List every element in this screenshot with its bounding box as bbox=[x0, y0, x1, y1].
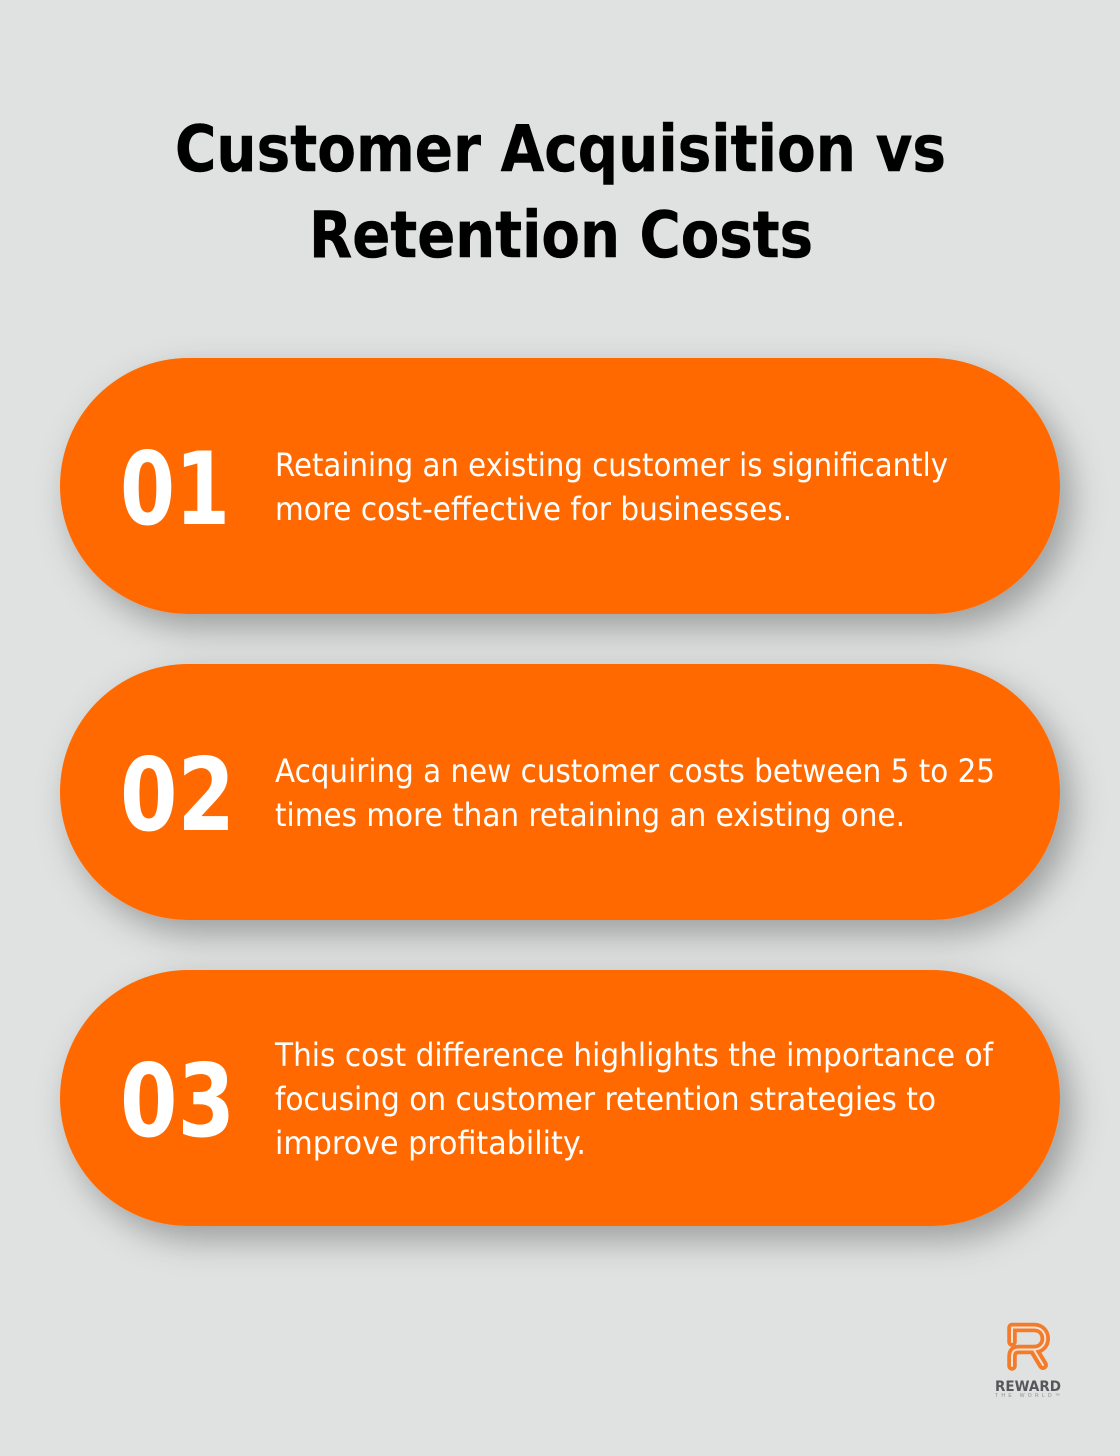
text block 01: Retaining an existing customer is significantly bbox=[275, 446, 948, 484]
number 03: 03 bbox=[120, 1042, 235, 1160]
number 01: 01 bbox=[120, 430, 230, 548]
text block 03: focusing on customer retention strategies to bbox=[275, 1080, 936, 1118]
panel: card 03 bbox=[60, 970, 1060, 1226]
text block 03: This cost difference highlights the importance of bbox=[274, 1036, 994, 1074]
panel: card 02 bbox=[60, 664, 1060, 920]
title: Retention Costs bbox=[309, 199, 813, 273]
text block 02: times more than retaining an existing one. bbox=[275, 796, 905, 834]
icon: R mark bbox=[1012, 1328, 1045, 1366]
text block 03: improve profitability. bbox=[275, 1124, 586, 1162]
logo tagline: THE WORLD™ bbox=[995, 1393, 1060, 1399]
panel: card 01 bbox=[60, 358, 1060, 614]
text block 01 bbox=[275, 446, 948, 528]
logo wordmark: REWARD bbox=[995, 1379, 1061, 1395]
text block 03 bbox=[274, 1036, 994, 1162]
text block 02: Acquiring a new customer costs between 5 to 25 bbox=[275, 752, 995, 790]
text block 01: more cost-effective for businesses. bbox=[275, 490, 792, 528]
logo: Reward the World bbox=[995, 1328, 1061, 1399]
title bbox=[175, 113, 946, 273]
title: Customer Acquisition vs bbox=[175, 113, 946, 187]
number 02: 02 bbox=[120, 736, 235, 854]
text block 02 bbox=[275, 752, 995, 834]
